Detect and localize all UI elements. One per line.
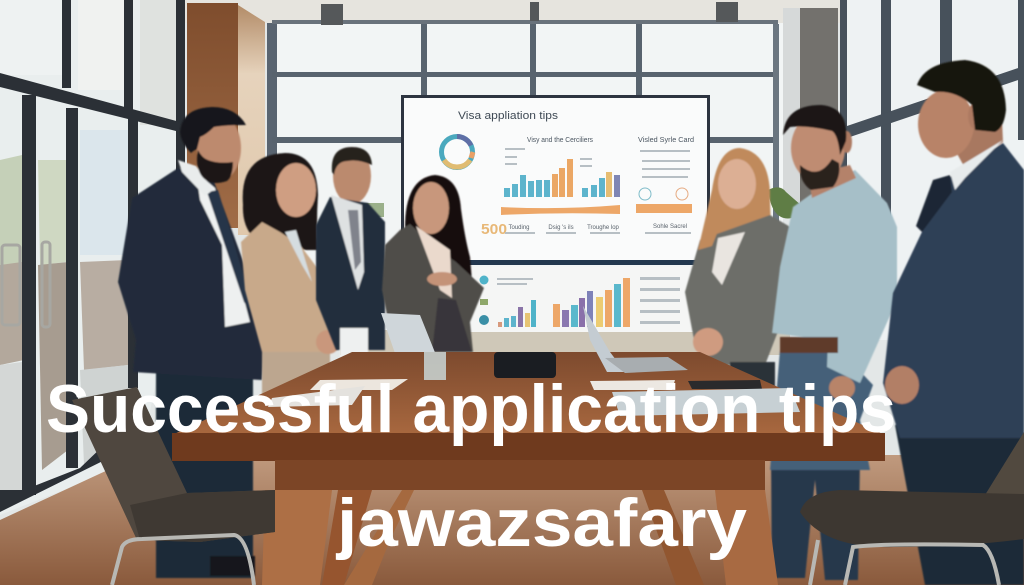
chair right <box>800 432 1024 585</box>
floor <box>0 455 1024 585</box>
right pillar and right windows <box>768 0 1024 340</box>
chair left <box>72 387 275 585</box>
screen: visa application tips: Touding <box>508 225 530 231</box>
screen: visa application tips: Visy and the Cerciliers <box>527 137 593 144</box>
lower panel icons <box>479 276 489 325</box>
screen: visa application tips: Sohle Sacrel <box>653 224 687 230</box>
table items <box>268 306 800 416</box>
person: woman blonde <box>685 148 792 390</box>
centre windows <box>267 20 790 355</box>
bar chart: upper <box>504 159 620 197</box>
screen: visa application tips: Visled Syrle Card <box>638 137 694 144</box>
orange band <box>501 205 620 215</box>
screen: visa application tips: Dsig 's ils <box>548 225 574 231</box>
ceiling cameras <box>321 2 738 25</box>
person: woman beige blazer <box>241 153 342 445</box>
left glass wall <box>0 0 185 515</box>
screen: visa application tips: 500 <box>481 221 507 238</box>
conference table <box>172 352 885 585</box>
person: woman grey blazer <box>382 175 484 352</box>
screen: visa application tips: Visa appliation tips <box>458 110 559 122</box>
lower panel <box>470 267 694 332</box>
person: man left <box>118 107 265 578</box>
subtitle: jawazsafary <box>335 485 747 561</box>
title: Successful application tips <box>46 371 896 447</box>
screen: visa application tips: Troughe lop <box>587 225 620 231</box>
person: man blue shirt <box>770 105 897 580</box>
wood pillar <box>187 3 265 235</box>
screen: visa application tips <box>401 95 710 332</box>
person: man right suit <box>883 60 1024 585</box>
donut icon <box>442 136 473 168</box>
person: man navy suit <box>316 147 385 360</box>
laptop left <box>381 313 470 368</box>
